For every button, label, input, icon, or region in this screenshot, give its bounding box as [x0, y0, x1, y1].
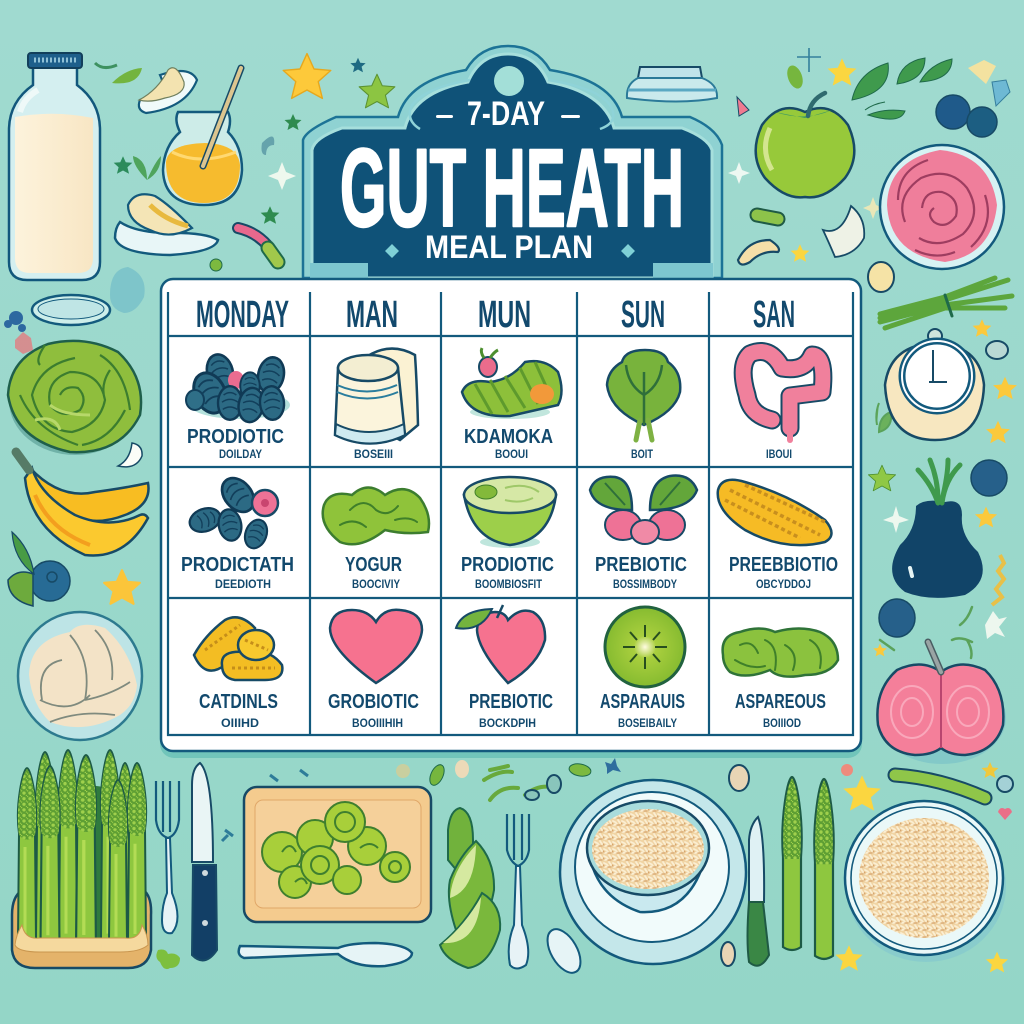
icon: blueberry left	[8, 532, 70, 606]
icon: knife right	[748, 817, 769, 966]
dash left	[436, 115, 453, 118]
icon: pink apple half	[877, 642, 1006, 764]
icon: green pod	[757, 215, 778, 219]
icon: small star bottom	[835, 945, 863, 971]
row 3 labels: ASPARAUIS	[600, 691, 685, 713]
row 1 labels: DOILDAY	[219, 447, 262, 461]
icon: leaves top right	[852, 58, 952, 119]
row 2 labels	[181, 554, 838, 591]
icon: bottom leaf ornament	[156, 950, 180, 969]
icon: asparagus spears right	[782, 777, 834, 959]
icon: cutting board	[244, 787, 431, 922]
icon: small star centre	[261, 206, 279, 224]
icon: gems top right	[968, 60, 1010, 106]
row 3 labels: CATDINLS	[199, 691, 278, 713]
icon: pink triangle	[737, 97, 749, 116]
row 3 labels: GROBIOTIC	[328, 691, 419, 713]
row 1 labels	[187, 426, 792, 461]
icon: blueberry right top	[971, 460, 1007, 496]
banner medallion	[494, 66, 524, 96]
icon: green slices	[440, 808, 500, 968]
row 3 sun: kiwi	[605, 607, 685, 687]
icon: small green pod top	[784, 63, 806, 91]
icon: spoon plate bottom	[541, 924, 587, 978]
row 2 labels: BOOMBIOSFIT	[475, 577, 543, 591]
icon: green apple	[756, 93, 854, 197]
row 2 labels: BOSSIMBODY	[613, 577, 677, 591]
icon: plate with grain bowl	[560, 780, 746, 964]
icon: fork middle	[507, 814, 529, 968]
icon: lettuce	[8, 341, 141, 455]
icon: rice bowl right	[845, 801, 1006, 962]
row 1 labels: BOOUI	[495, 447, 528, 461]
row 2 labels: OBCYDDOJ	[756, 577, 811, 591]
row 1 labels: BOSEIII	[354, 447, 393, 461]
icon: milk bottle	[9, 53, 100, 280]
day headers	[196, 294, 795, 336]
row 1 labels: IBOUI	[766, 447, 792, 461]
row 2 labels: PRODICTATH	[181, 554, 294, 576]
icon: fork left	[156, 781, 179, 933]
icon: small star bottom right	[986, 952, 1008, 972]
icon: star top right	[828, 58, 856, 86]
day headers: MUN	[478, 294, 531, 336]
dash right	[561, 115, 580, 118]
icon: spoon bottom	[239, 943, 412, 966]
title banner	[303, 46, 722, 278]
icon: glass dish	[32, 295, 110, 325]
icon: blueberry right	[879, 599, 915, 637]
row 3 man: heart	[330, 610, 422, 683]
heading: gut heath: GUT HEATH	[340, 127, 684, 250]
icon: honey jar with spoon	[163, 68, 242, 205]
diamond ornaments	[385, 244, 635, 258]
icon: small lid	[627, 67, 717, 102]
row 3 monday: gold oat bars	[194, 617, 282, 680]
icon: small star top corner	[982, 762, 998, 778]
row 2 man: green blob	[323, 488, 429, 544]
icon: star bottom	[843, 775, 881, 811]
icon: star right of cashew	[791, 244, 809, 262]
row 2 labels: YOGUR	[345, 554, 402, 576]
row 2 labels: BOOCIVIY	[352, 577, 400, 591]
icon: blueberries	[936, 95, 997, 137]
icon: dark pear	[892, 460, 983, 598]
row 1 labels: KDAMOKA	[464, 426, 553, 448]
icon: cashew	[738, 240, 779, 265]
row 1 labels: BOIT	[631, 447, 654, 461]
day headers: MONDAY	[196, 294, 289, 336]
icon: glass bowl with cauliflower	[18, 612, 142, 740]
day headers: SAN	[753, 294, 795, 336]
row 3 labels: OIIIHD	[221, 716, 259, 730]
row 1 sun: spinach	[607, 350, 680, 440]
icon: star left	[104, 570, 140, 604]
icon: green bundle	[880, 278, 1012, 328]
row 1 man: yogurt cups	[335, 349, 418, 444]
icon: small stars right	[873, 319, 1017, 656]
row 3 labels: ASPAREOUS	[735, 691, 826, 713]
row 1 labels: PRODIOTIC	[187, 426, 284, 448]
heading: meal plan: MEAL PLAN	[425, 229, 593, 265]
row 2 labels: PREEBBIOTIO	[729, 554, 838, 576]
row 3 labels	[199, 691, 826, 730]
icon: green pod bottom right	[895, 775, 985, 798]
row 3 labels: BOOIIIHIH	[352, 716, 403, 730]
icon: banana bunch	[16, 452, 149, 556]
icon: crescent shell	[823, 206, 864, 257]
row 3 labels: BOSEIBAILY	[618, 716, 677, 730]
row 3 labels: BOIIIOD	[763, 716, 801, 730]
green rings on board	[262, 802, 410, 898]
heading: 7-day: 7-DAY	[467, 95, 545, 133]
row 2 mun: soup bowl	[464, 477, 556, 548]
row 3 labels: PREBIOTIC	[469, 691, 553, 713]
row 2 san: corn	[718, 480, 832, 545]
row 3 mun: peach heart	[456, 605, 545, 683]
row 2 labels: DEEDIOTH	[215, 577, 271, 591]
icon: knife left	[192, 763, 217, 960]
row 2 labels: PREBIOTIC	[595, 554, 687, 576]
icon: green star	[359, 74, 395, 108]
icon: crescent	[118, 443, 142, 467]
row 1 mun: pickles	[462, 348, 562, 419]
row 2 labels: PRODIOTIC	[461, 554, 554, 576]
icon: seed slice	[868, 262, 894, 292]
icon: green star right	[868, 465, 896, 491]
icon: pink and green pod	[238, 228, 278, 262]
row 3 san: green curls	[723, 628, 838, 677]
row 3 labels: BOCKDPIH	[479, 716, 536, 730]
day headers: MAN	[346, 294, 398, 336]
day headers: SUN	[621, 294, 665, 336]
icon: banana plate top	[139, 68, 197, 113]
icon: plate with slices	[115, 194, 218, 255]
meal plan table card	[160, 279, 862, 758]
row 2 monday: berries	[186, 472, 278, 551]
icon: small star left	[114, 156, 132, 174]
icon: yellow star	[283, 54, 331, 98]
row 1 monday: blue berries	[186, 351, 290, 424]
icon: small star edge	[284, 114, 302, 130]
icon: pink rose bowl	[880, 145, 1004, 269]
icon: small navy star	[350, 58, 366, 72]
row 1 san: colon	[743, 351, 823, 440]
icon: asparagus bunch	[12, 750, 151, 968]
icon: stopwatch	[885, 329, 984, 440]
icon: small pebble	[986, 341, 1008, 359]
row 2 sun: radish leaves	[590, 476, 697, 544]
